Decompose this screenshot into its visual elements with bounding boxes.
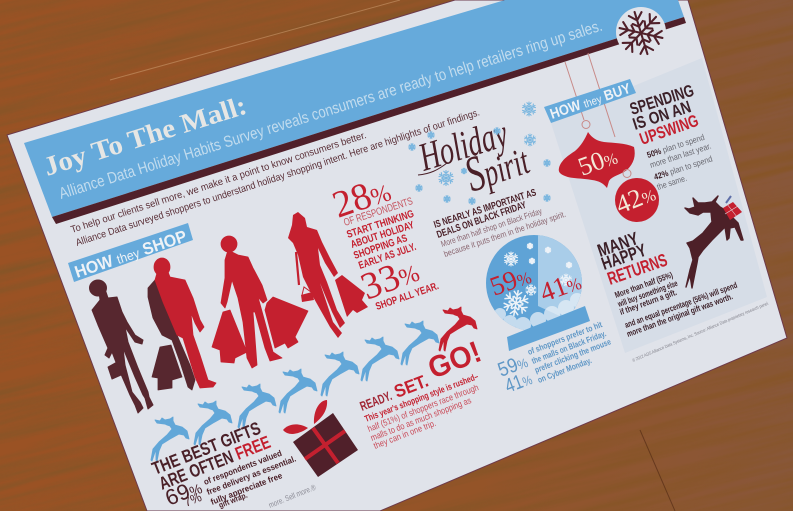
many happy returns body: and an equal percentage (56%) will spend [623, 280, 739, 330]
globe legend: prefer clicking the mouse [533, 336, 613, 375]
footer slogan: more. Sell more.® [267, 483, 317, 510]
ready set go heading: READY. [358, 388, 394, 414]
ornament 50 percent [559, 120, 635, 188]
spending stats: 42% plan to spend [653, 153, 714, 182]
best gifts heading: ARE OFTEN FREE [156, 432, 273, 494]
globe legend: 41% [502, 367, 535, 398]
header maroon stripe [52, 17, 686, 224]
best gifts heading: THE BEST GIFTS [149, 418, 263, 479]
stat: 33 percent: SHOP ALL YEAR. [374, 280, 440, 313]
best gifts stats: free delivery as essential. [205, 453, 297, 497]
ready set go heading: SET. [391, 371, 431, 402]
ready set go body: they can in one trip. [372, 418, 437, 451]
ready set go heading: GO! [424, 335, 486, 386]
globe legend: 59% [495, 350, 531, 382]
best gifts stats: 7% [182, 489, 204, 510]
best gifts stats: gift wrap. [217, 491, 249, 510]
spending heading: UPSWING [637, 111, 701, 149]
gift box icon [283, 400, 358, 477]
shopper 1 silhouette [90, 280, 153, 413]
spending heading: IS ON AN [630, 97, 693, 134]
globe legend: of shoppers prefer to hit [526, 319, 604, 357]
spending heading: SPENDING [627, 81, 696, 119]
best gifts stats: of respondents valued [202, 448, 283, 487]
many happy returns body: more than the original gift was worth. [625, 291, 734, 339]
snow globe chart: 41% [536, 265, 585, 308]
stat: 33 percent: 33% [355, 248, 424, 308]
ready set go body [363, 371, 480, 451]
many happy returns heading [595, 228, 670, 289]
ornament 42 percent: 42% [611, 178, 659, 220]
holiday spirit caption: because it puts them in the holiday spirit. [442, 209, 567, 259]
stat: 28 percent: START THINKING [345, 208, 416, 241]
shopper 2 half-coloured silhouette [148, 258, 216, 390]
heading: how they shop: HOW they SHOP [72, 227, 189, 282]
many happy returns heading: MANY [595, 228, 641, 261]
best gifts stats [162, 448, 297, 511]
snowflake badge [613, 5, 669, 61]
spending stats: more than last year. [649, 141, 712, 170]
handbag [301, 287, 314, 302]
globe base [507, 306, 590, 351]
holiday spirit caption: More than half shop on Black Friday [439, 206, 544, 249]
ready set go body: This year's shopping style is rushed– [363, 371, 480, 424]
many happy returns heading: HAPPY [599, 240, 649, 274]
spending stats: the same. [656, 173, 688, 192]
stat: 28 percent [327, 168, 418, 272]
header band [24, 0, 686, 224]
shopper 3 silhouette with bags [212, 236, 308, 368]
ready set go body: malls to do as much shopping as [369, 395, 473, 443]
many happy returns body: More than half (55%) [613, 270, 674, 300]
snow globe chart [480, 230, 590, 351]
best gifts stats: 69% [162, 474, 205, 511]
holiday spirit lettering [413, 110, 536, 202]
stat: 28 percent: 28% [327, 168, 396, 227]
ready set go body: half (51%) of shoppers race through [366, 382, 480, 434]
intro text: Alliance Data surveyed shoppers to understand holiday shopping intent. Here are highlights of our findings. [75, 107, 481, 249]
stat: 28 percent: SHOPPING AS [352, 232, 409, 262]
ready set go heading [358, 335, 486, 414]
ornament 50 percent: 50% [574, 141, 621, 182]
many happy returns body: will buy something else [616, 278, 679, 309]
title: Joy To The Mall: [40, 90, 250, 182]
stat: 28 percent: OF RESPONDENTS [342, 195, 414, 229]
holiday spirit caption: IS NEARLY AS IMPORTANT AS [433, 187, 538, 231]
ornament strings [565, 53, 615, 137]
globe legend: the malls on Black Friday. [530, 328, 607, 366]
holiday spirit caption [433, 187, 567, 259]
intro text: To help our clients sell more, we make it a point to know consumers better. [70, 130, 368, 236]
globe legend [495, 319, 613, 398]
stat: 28 percent: EARLY AS JULY. [357, 241, 418, 272]
best gifts stats: fully appreciate free [209, 470, 284, 507]
scattered snowflakes [408, 102, 551, 204]
holiday spirit lettering: Spirit [457, 129, 536, 202]
stat: 28 percent: ABOUT HOLIDAY [349, 219, 416, 251]
globe percentages: 59% [486, 259, 535, 302]
stat: 33 percent [355, 248, 440, 313]
holiday spirit caption: DEALS ON BLACK FRIDAY [435, 200, 528, 241]
globe snowflakes [501, 243, 572, 318]
heading: how they buy: HOW they BUY [548, 81, 633, 123]
shopper 4 silhouette with bags [288, 212, 368, 338]
many happy returns heading: RETURNS [605, 250, 670, 289]
spending stats: 50% plan to spend [646, 132, 706, 160]
many happy returns body: if they return a gift. [618, 287, 678, 317]
ornament 42 percent [611, 170, 659, 222]
panel: how they buy background [550, 58, 767, 353]
large reindeer with gift [685, 196, 743, 288]
spending stats [646, 132, 714, 192]
globe legend: on Cyber Monday. [536, 355, 593, 385]
many happy returns body [613, 270, 739, 339]
holiday spirit lettering: Holiday [413, 110, 513, 180]
reindeer row [151, 307, 477, 461]
spending heading [627, 81, 701, 149]
